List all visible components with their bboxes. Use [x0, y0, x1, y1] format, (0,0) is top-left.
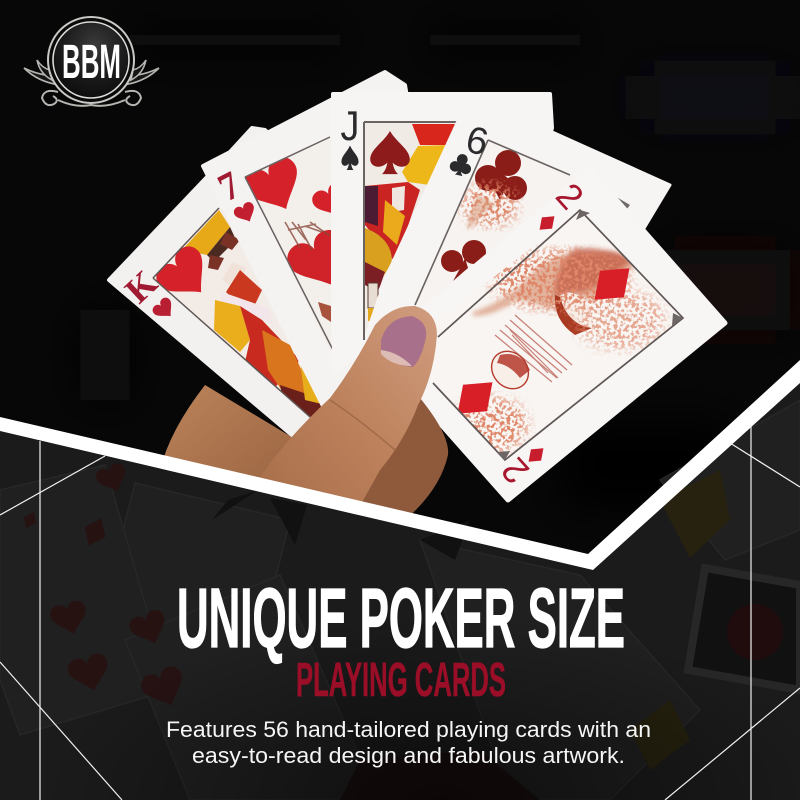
king index: K — [117, 262, 165, 311]
bottom textured panel — [0, 383, 800, 800]
six index: 6 — [462, 119, 492, 165]
fingers — [160, 385, 345, 520]
logo: BBM: BBM — [62, 36, 121, 89]
thin white frame lines — [0, 426, 800, 800]
faded suits — [20, 461, 191, 713]
two index top: 2 — [548, 175, 592, 217]
jack artwork — [365, 123, 455, 333]
thumb — [258, 306, 437, 515]
seven artwork — [246, 158, 331, 322]
king artwork — [154, 208, 321, 417]
subtitle: PLAYING CARDS — [296, 654, 506, 707]
description text: easy-to-read design and fabulous artwork. — [192, 743, 625, 768]
description text: Features 56 hand-tailored playing cards with an — [166, 717, 651, 742]
thumbnail — [381, 316, 426, 367]
card: jack of spades — [333, 94, 552, 372]
card: seven of hearts — [200, 70, 408, 406]
description text — [166, 717, 651, 768]
ring finger — [340, 398, 448, 520]
two artwork — [453, 244, 672, 457]
card: six of clubs — [378, 121, 672, 306]
logo: BBM — [24, 17, 159, 106]
seven index: 7 — [211, 163, 247, 210]
background cards collage — [0, 400, 800, 800]
six artwork — [441, 150, 527, 281]
jack index: J — [341, 103, 359, 149]
white diagonal band — [0, 360, 800, 570]
logo flourishes — [24, 60, 159, 106]
hand — [160, 306, 448, 520]
card: two of diamonds — [421, 184, 728, 502]
two index bottom: 2 — [493, 450, 537, 492]
card: king of hearts — [106, 126, 321, 437]
card back — [688, 568, 800, 690]
